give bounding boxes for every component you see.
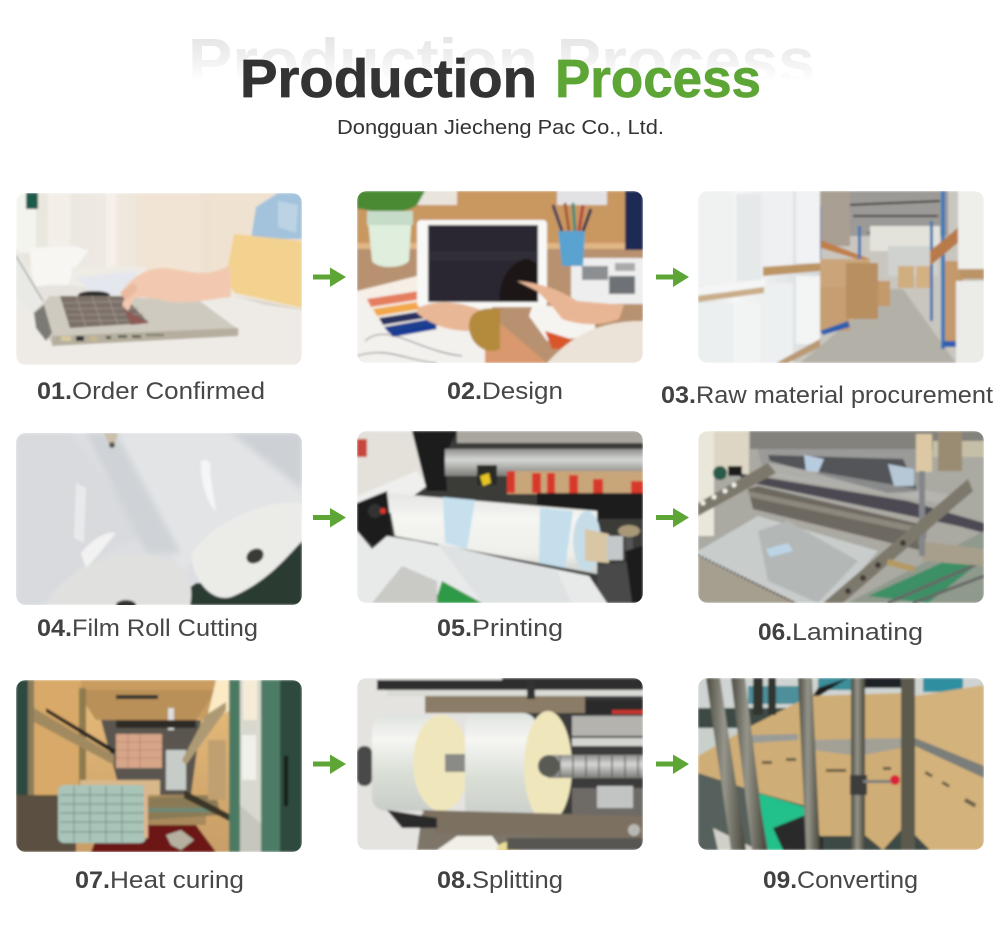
arrow: 08 to 09 xyxy=(656,754,689,774)
subtitle: Dongguan Jiecheng Pac Co., Ltd. xyxy=(337,117,664,139)
photo: hand typing on laptop xyxy=(16,193,302,365)
panel: step 09 converting xyxy=(698,678,984,894)
panel: step 03 raw material procurement xyxy=(661,191,993,409)
label: 08 xyxy=(437,867,563,894)
arrow: 02 to 03 xyxy=(656,268,689,287)
label: 03: 03. xyxy=(661,382,696,409)
label: 02: 02. xyxy=(447,378,482,405)
title: Production xyxy=(240,49,537,109)
label: 08: Splitting xyxy=(472,867,563,894)
panel: step 02 design xyxy=(357,191,643,405)
label: 08: 08. xyxy=(437,867,472,894)
photo: splitting machine with clear film rolls xyxy=(357,678,643,858)
photo: hands on tablet at design desk xyxy=(357,191,643,363)
label: 05: 05. xyxy=(437,615,472,642)
photo: kraft paper converting machine xyxy=(698,678,984,850)
photo: curing oven with label rolls xyxy=(16,680,302,852)
arrow: 04 to 05 xyxy=(313,508,346,528)
label: 03: Raw material procurement xyxy=(696,382,993,409)
title: Production Process xyxy=(188,27,815,96)
title: Process xyxy=(555,49,761,109)
label: 02: Design xyxy=(482,378,563,405)
photo: warehouse with film rolls xyxy=(698,191,984,363)
label: 07: 07. xyxy=(75,867,110,894)
panel: step 01 order confirmed xyxy=(16,193,302,405)
label: 05: Printing xyxy=(472,615,563,642)
label: 07: Heat curing xyxy=(110,867,244,894)
label: 09: 09. xyxy=(763,867,797,894)
label: 04: 04. xyxy=(37,615,72,642)
label: 04: Film Roll Cutting xyxy=(72,615,258,642)
panel: step 05 printing xyxy=(357,431,643,642)
arrow: 05 to 06 xyxy=(656,508,689,528)
label: 01: Order Confirmed xyxy=(72,378,265,405)
panel: step 08 splitting xyxy=(357,678,643,894)
panel: step 04 film roll cutting xyxy=(16,433,302,642)
photo: printing press with film roll xyxy=(357,431,643,603)
label: 05 xyxy=(437,615,563,642)
arrow: 07 to 08 xyxy=(313,754,346,774)
photo: laminating machine rollers xyxy=(698,431,984,603)
label: 09: Converting xyxy=(797,867,918,894)
label: 01: 01. xyxy=(37,378,72,405)
label: 06: Laminating xyxy=(792,619,923,646)
panel: step 07 heat curing xyxy=(16,680,302,894)
label: 06: 06. xyxy=(758,619,792,646)
photo: white film rolls xyxy=(16,433,302,610)
panel: step 06 laminating xyxy=(698,431,984,646)
label: 02 xyxy=(447,378,563,405)
arrow: 01 to 02 xyxy=(313,268,346,287)
